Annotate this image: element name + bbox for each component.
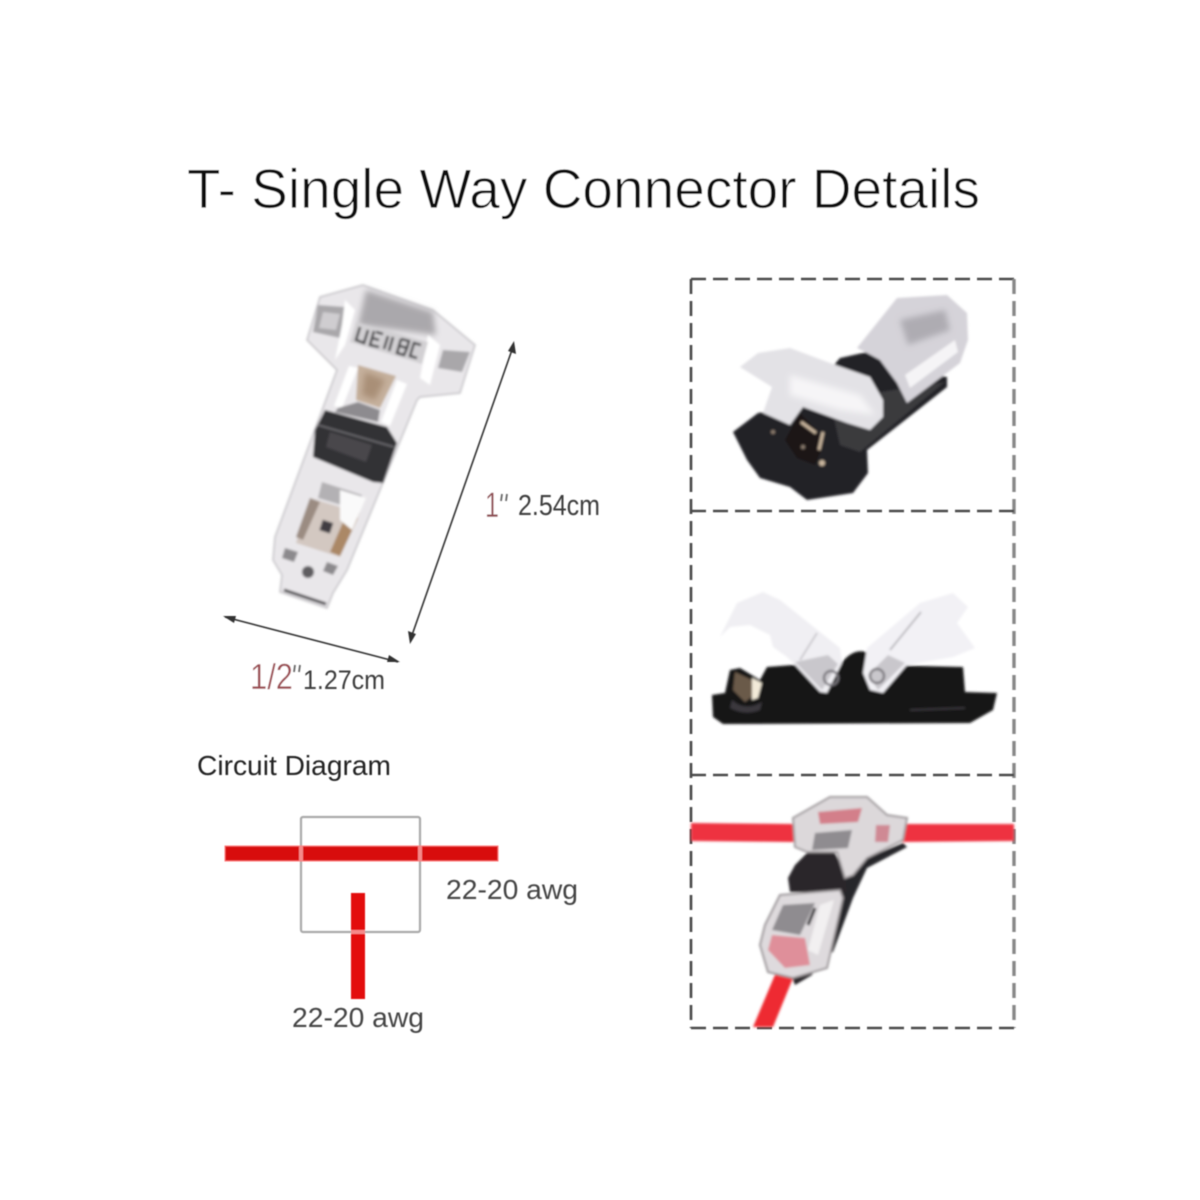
red wire right — [897, 824, 1014, 842]
red wire left — [691, 823, 795, 842]
photo: connector fully open — [712, 592, 997, 724]
right clear cap — [857, 295, 968, 403]
upper contact interior — [356, 365, 396, 408]
upper clear housing — [793, 797, 907, 878]
embossed lettering band — [350, 322, 428, 364]
metal contact highlight — [752, 678, 762, 700]
black base — [733, 352, 947, 500]
left clear flap — [720, 592, 842, 693]
height label: 2.54cm — [518, 490, 600, 522]
height label: 1 — [485, 486, 499, 525]
connector clear body — [273, 285, 475, 608]
height label — [485, 486, 600, 525]
left clear cap — [740, 348, 883, 430]
height dimension arrow — [408, 341, 516, 644]
photo: connector half open — [733, 295, 968, 500]
photo: connector with red wires — [691, 797, 1014, 1027]
title: T- Single Way Connector Details — [187, 157, 980, 220]
width dimension arrow — [223, 616, 400, 662]
right opening — [438, 350, 470, 372]
red wire bottom — [753, 970, 793, 1027]
width label — [250, 656, 385, 697]
wire gauge label bottom: 22-20 awg — [292, 1002, 424, 1033]
width label: 1/2 — [250, 656, 293, 697]
product photo: closed connector — [273, 285, 475, 608]
circuit diagram — [225, 817, 578, 1033]
width label: 1.27cm — [303, 665, 385, 695]
lower contact interior — [318, 482, 362, 510]
left opening — [313, 305, 345, 338]
dashed frame: three photo panels — [691, 279, 1014, 1028]
circuit diagram heading: Circuit Diagram — [197, 750, 391, 781]
black base — [712, 651, 997, 724]
bottom mouth — [284, 590, 326, 604]
horizontal wire — [225, 846, 498, 861]
lower clear housing — [760, 890, 843, 978]
black latch band — [313, 410, 397, 483]
connector box — [301, 817, 420, 932]
right clear flap — [863, 593, 975, 693]
metal contacts — [785, 413, 822, 465]
black base back — [815, 843, 907, 955]
vertical wire — [351, 893, 365, 999]
top gray shading — [358, 290, 436, 335]
wire gauge label right: 22-20 awg — [446, 874, 578, 905]
